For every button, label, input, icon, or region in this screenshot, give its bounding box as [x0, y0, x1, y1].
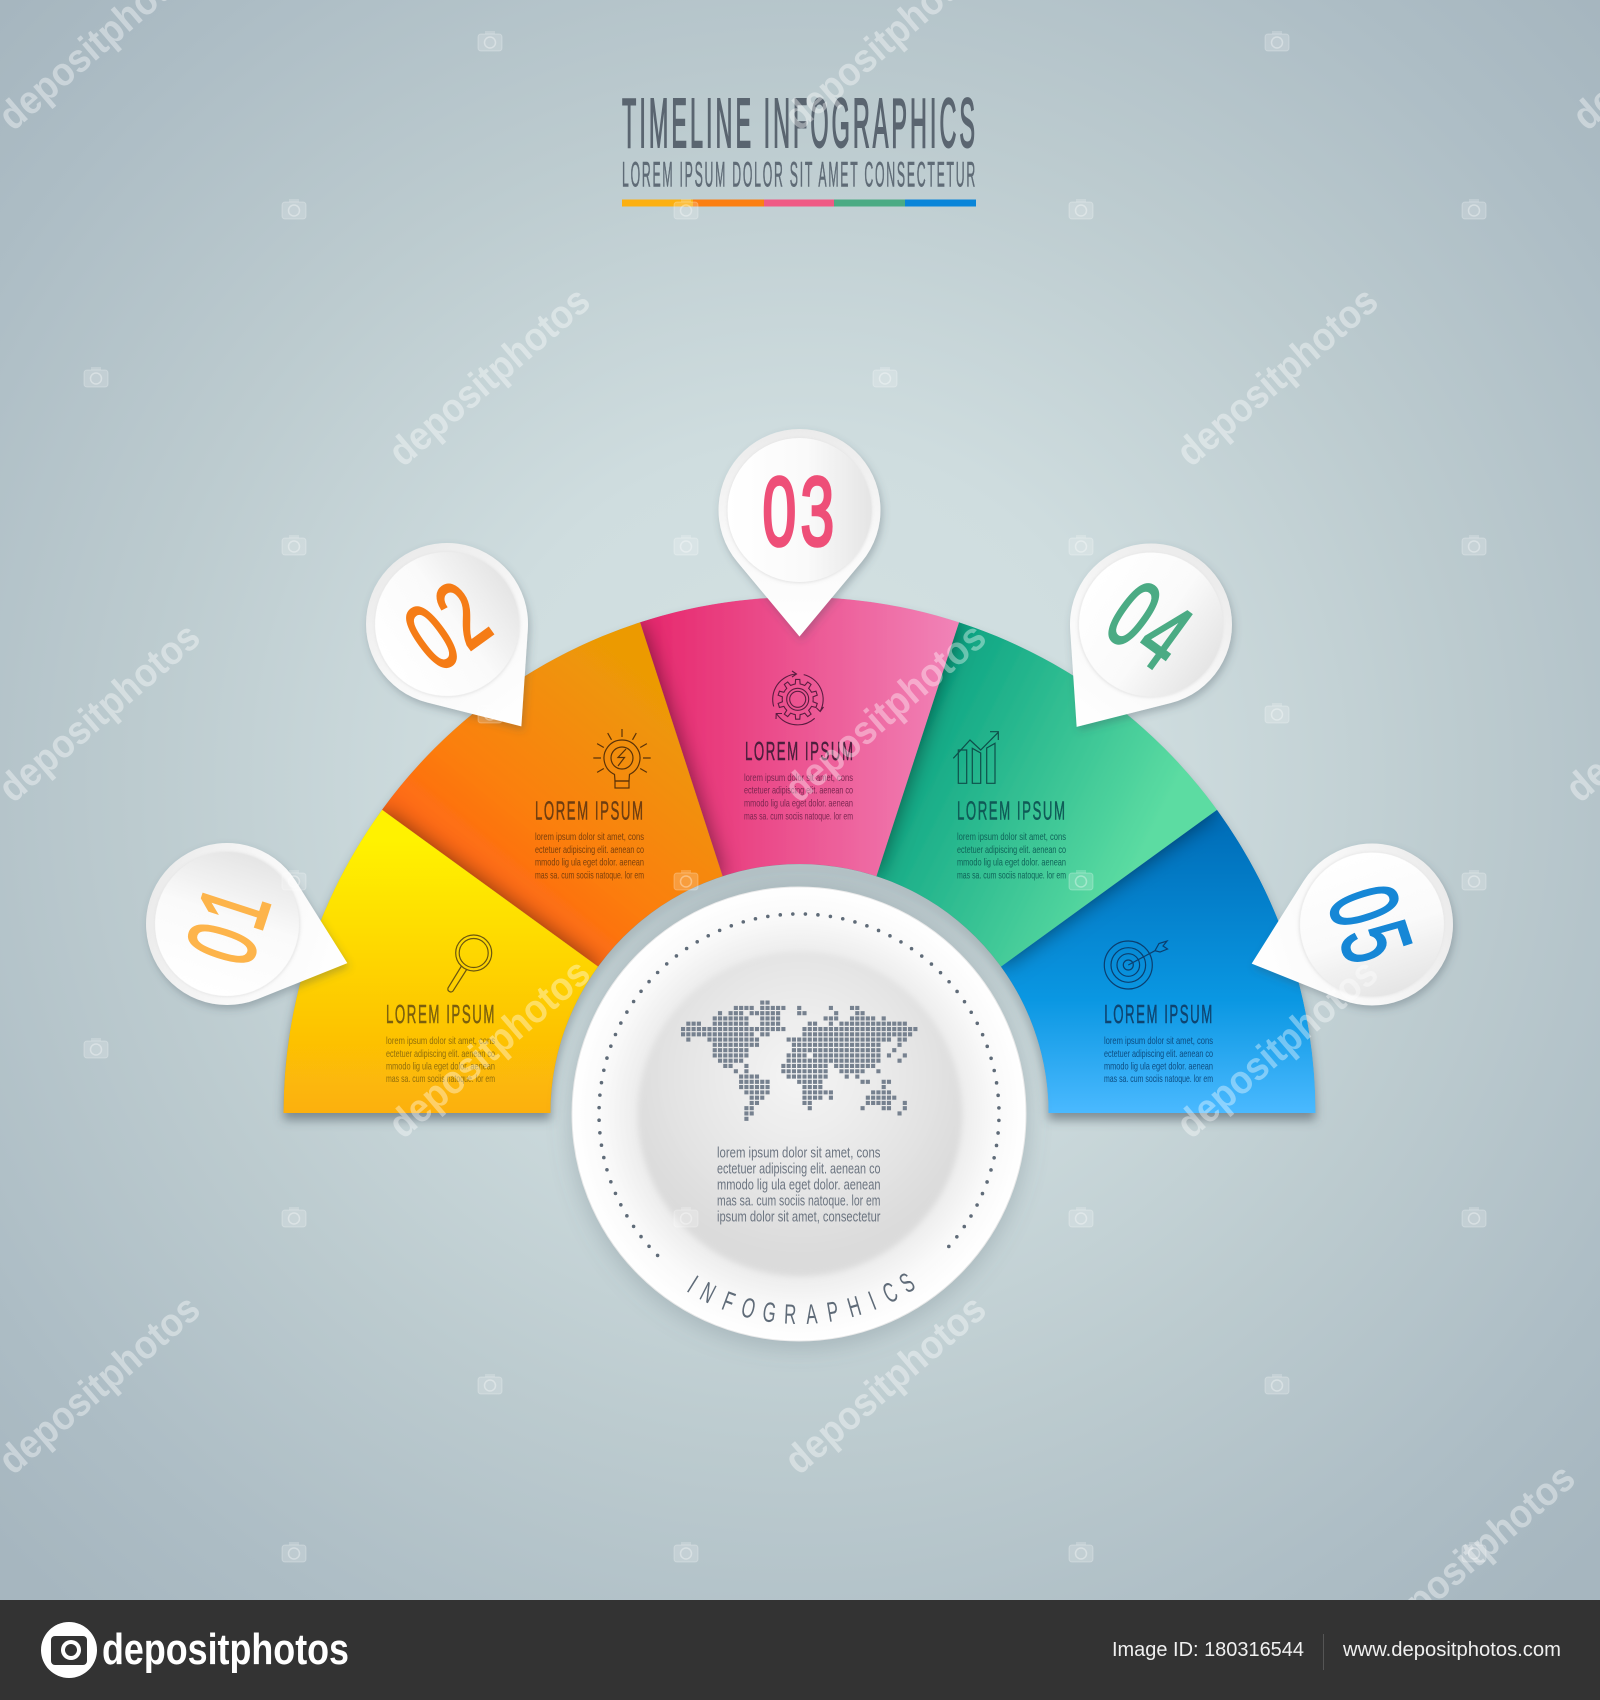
curved label: O	[738, 1291, 759, 1325]
body text	[1104, 1035, 1213, 1085]
watermark text: depositphotos	[776, 614, 994, 811]
pin 04	[1011, 511, 1264, 774]
inner disc	[638, 952, 962, 1276]
centre body text: mas sa. cum sociis natoque. lor em	[717, 1192, 880, 1210]
body text: mmodo lig ula eget dolor. aenean	[1104, 1060, 1213, 1072]
plate shadow	[569, 889, 1029, 1349]
icon: rising bar chart	[953, 732, 998, 783]
panel: step 4 text and icon	[953, 732, 1066, 882]
curved label: H	[844, 1290, 864, 1323]
centre body text: mmodo lig ula eget dolor. aenean	[717, 1176, 880, 1194]
watermark text: depositphotos	[1365, 1455, 1583, 1652]
footer logo text: depositphotos	[102, 1625, 349, 1674]
pin 02: 02	[386, 558, 511, 691]
body text: mas sa. cum sociis natoque. lor em	[386, 1073, 495, 1085]
body text: ectetuer adipiscing elit. aenean co	[535, 844, 644, 856]
watermark text: depositphotos	[1168, 950, 1386, 1147]
body text: lorem ipsum dolor sit amet, cons	[744, 772, 853, 784]
centre plate	[572, 887, 1026, 1341]
body text: mmodo lig ula eget dolor. aenean	[535, 856, 644, 868]
pin 02	[334, 511, 587, 774]
curved label	[683, 1266, 920, 1330]
body text: mmodo lig ula eget dolor. aenean	[957, 856, 1066, 868]
pin 05	[1227, 822, 1474, 1041]
body text: mas sa. cum sociis natoque. lor em	[957, 870, 1066, 882]
body text: lorem ipsum dolor sit amet, cons	[535, 831, 644, 843]
site url: www.depositphotos.com	[1342, 1639, 1561, 1661]
body text	[744, 772, 853, 822]
curved label: I	[683, 1269, 703, 1298]
centre body text	[717, 1144, 881, 1226]
body text: lorem ipsum dolor sit amet, cons	[1104, 1035, 1213, 1047]
pin 04: 04	[1088, 560, 1214, 693]
icon: magnifier	[448, 935, 492, 992]
body text	[957, 831, 1066, 882]
icon: light bulb	[593, 729, 651, 788]
wedge 4 green	[876, 622, 1217, 967]
body text: lorem ipsum dolor sit amet, cons	[386, 1035, 495, 1047]
pin 05: 05	[1307, 873, 1434, 979]
centre body text: ipsum dolor sit amet, consectetur	[717, 1208, 881, 1226]
curved label: C	[877, 1276, 902, 1309]
body text: ectetuer adipiscing elit. aenean co	[957, 844, 1066, 856]
body text: ectetuer adipiscing elit. aenean co	[386, 1048, 495, 1060]
curved label: F	[718, 1285, 739, 1318]
watermark text: depositphotos	[776, 1286, 994, 1483]
curved label: R	[784, 1298, 797, 1330]
heading: LOREM IPSUM	[957, 795, 1066, 825]
gap shading around plate	[550, 864, 1048, 1113]
panel: step 3 text and icon	[744, 671, 854, 822]
wedge 5 blue	[1001, 810, 1316, 1113]
body text: mas sa. cum sociis natoque. lor em	[744, 810, 853, 822]
title block	[622, 84, 978, 206]
icon: gear with cycle arrows	[773, 671, 824, 725]
wedge 1 yellow	[284, 810, 598, 1113]
colour bar	[622, 200, 976, 206]
body text: mas sa. cum sociis natoque. lor em	[1104, 1073, 1213, 1085]
footer logo icon	[41, 1622, 97, 1678]
image id: Image ID: 180316544	[1112, 1639, 1304, 1661]
curved label: S	[894, 1266, 920, 1299]
body text: ectetuer adipiscing elit. aenean co	[744, 785, 853, 797]
body text: lorem ipsum dolor sit amet, cons	[957, 831, 1066, 843]
icon: target with arrow	[1104, 941, 1168, 989]
heading: LOREM IPSUM	[386, 999, 496, 1029]
body text: ectetuer adipiscing elit. aenean co	[1104, 1048, 1213, 1060]
body text: mmodo lig ula eget dolor. aenean	[386, 1060, 495, 1072]
dotted ring	[599, 914, 999, 1255]
pin 03: 03	[762, 457, 838, 566]
footer bar	[0, 1600, 1600, 1700]
body text: mas sa. cum sociis natoque. lor em	[535, 870, 644, 882]
panel: step 2 text and icon	[535, 729, 651, 882]
semicircle fan of five coloured wedges	[284, 597, 1316, 1113]
body text	[535, 831, 644, 882]
heading: LOREM IPSUM	[535, 795, 644, 825]
body text	[386, 1035, 495, 1085]
body text: mmodo lig ula eget dolor. aenean	[744, 797, 853, 809]
pin 01: 01	[165, 871, 292, 976]
watermark text: depositphotos	[1168, 278, 1386, 475]
world map dots	[681, 1003, 918, 1119]
heading: LOREM IPSUM	[745, 736, 854, 766]
fan base shadow	[284, 604, 1316, 1120]
centre body text: lorem ipsum dolor sit amet, cons	[717, 1144, 880, 1162]
curved label: A	[805, 1298, 819, 1330]
watermark text: depositphotos	[380, 950, 598, 1147]
panel: step 1 text and icon	[386, 935, 496, 1085]
curved label: P	[825, 1295, 841, 1328]
watermark text: depositphotos	[380, 278, 598, 475]
pin 03	[718, 429, 880, 636]
panel: step 5 text and icon	[1104, 941, 1214, 1085]
wedge 3 pink	[640, 597, 959, 876]
curved label: G	[761, 1296, 778, 1329]
curved label: I	[864, 1285, 880, 1316]
heading: LOREM IPSUM	[1104, 999, 1214, 1029]
plate ring	[572, 887, 1026, 1341]
wedge 2 orange	[382, 622, 723, 967]
pin 01	[125, 822, 372, 1040]
centre body text: ectetuer adipiscing elit. aenean co	[717, 1160, 880, 1178]
watermark cameras	[84, 31, 1486, 1562]
curved label: N	[696, 1276, 721, 1309]
